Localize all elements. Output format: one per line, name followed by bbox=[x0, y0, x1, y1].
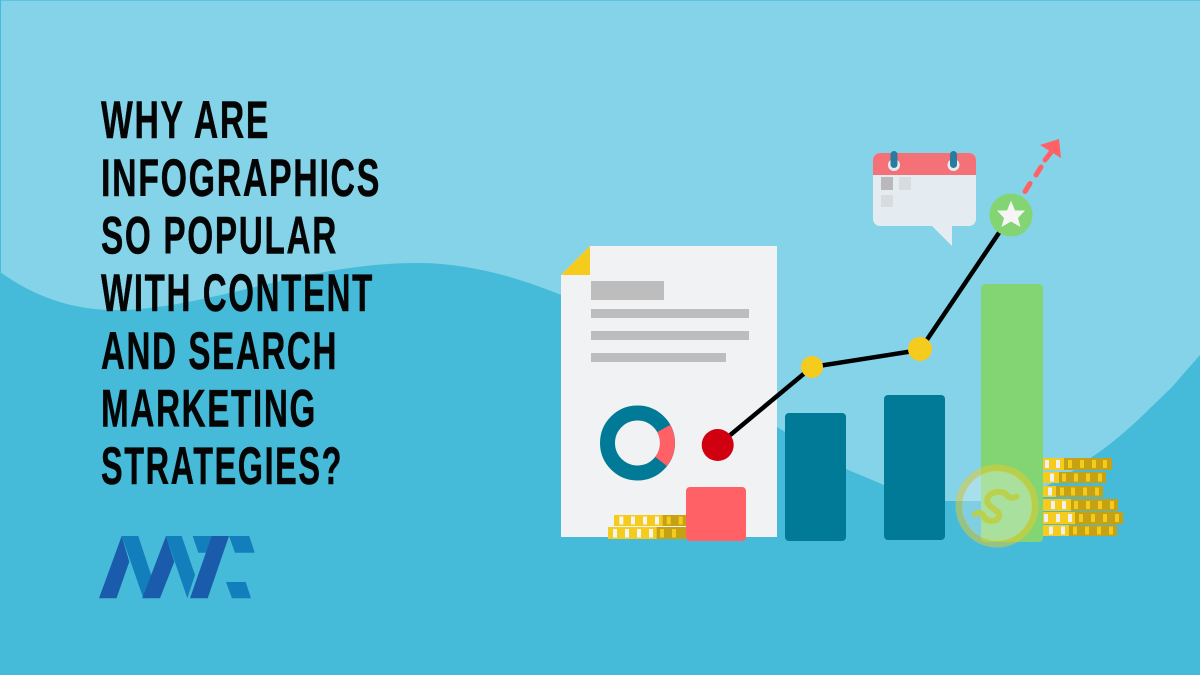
red block bbox=[686, 487, 746, 541]
title: SO POPULAR bbox=[101, 206, 338, 266]
title: MARKETING bbox=[101, 380, 317, 438]
title: INFOGRAPHICS bbox=[101, 149, 381, 208]
bar 3 bbox=[981, 284, 1043, 542]
point 2 bbox=[801, 356, 823, 378]
document text lines bbox=[591, 309, 749, 362]
coin stacks bbox=[1043, 458, 1123, 536]
bar 2 bbox=[884, 395, 945, 540]
bar 1 bbox=[785, 413, 846, 541]
title bbox=[101, 91, 381, 496]
donut chart bbox=[608, 413, 668, 473]
logo bbox=[99, 536, 255, 598]
point 3 bbox=[908, 337, 932, 361]
dashed arrow bbox=[1025, 139, 1061, 192]
title: AND SEARCH bbox=[101, 322, 338, 381]
document heading bar bbox=[591, 281, 664, 300]
translucent dollar coin bbox=[959, 468, 1035, 544]
point 1 bbox=[702, 429, 734, 461]
title: WITH CONTENT bbox=[101, 264, 374, 323]
title: STRATEGIES? bbox=[101, 437, 343, 496]
document bbox=[561, 246, 777, 537]
star badge bbox=[990, 194, 1032, 236]
title: WHY ARE bbox=[101, 91, 270, 150]
folded corner bbox=[561, 246, 590, 275]
trend line bbox=[717, 215, 1011, 446]
calendar bubble bbox=[873, 151, 976, 246]
coins under document bbox=[608, 515, 686, 539]
